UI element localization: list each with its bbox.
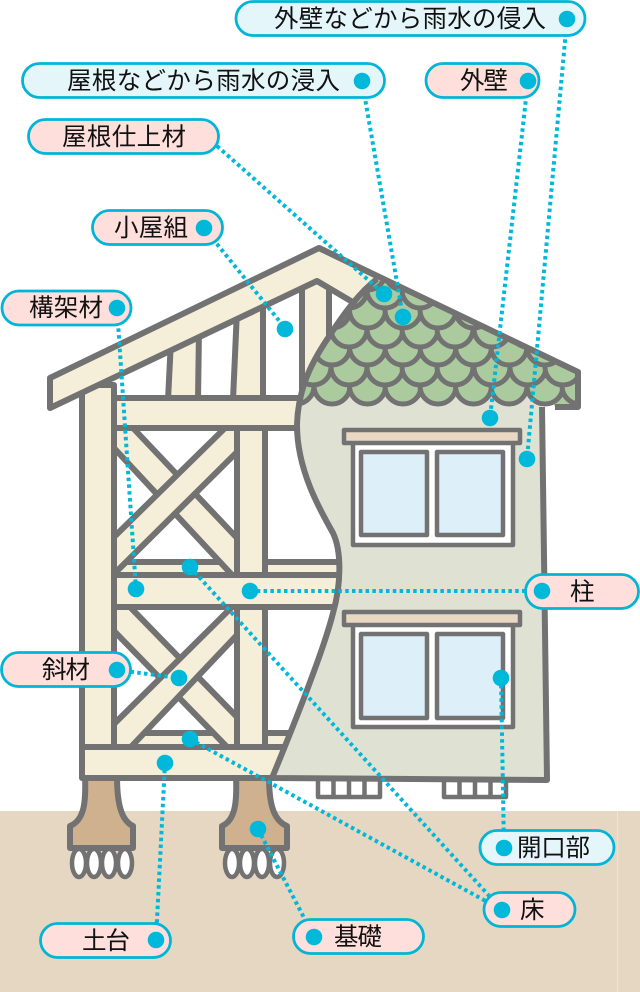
lower window — [344, 612, 520, 727]
sill — [82, 747, 312, 778]
label: 構架材: 構架材 — [29, 294, 103, 322]
leader lines — [117, 19, 567, 940]
label: 斜材: 斜材 — [42, 656, 90, 684]
label: 柱 — [526, 574, 638, 608]
wall and roof outline — [272, 248, 578, 780]
label: 構架材 — [2, 291, 131, 325]
roof tiles — [302, 280, 575, 407]
label: 基礎 — [294, 920, 424, 954]
label: 開口部 — [480, 830, 614, 864]
label: 土台: 土台 — [82, 927, 130, 955]
upper window — [344, 430, 520, 545]
label: 屋根仕上材 — [28, 120, 218, 154]
roof beam — [50, 248, 420, 408]
floor joists — [114, 562, 344, 748]
foundation: right footing — [222, 776, 287, 877]
foundation: left footing — [70, 776, 133, 877]
label: 外壁などから雨水の侵入 — [236, 2, 585, 36]
attic studs — [168, 270, 329, 400]
ground — [0, 811, 640, 992]
label: 床 — [484, 892, 575, 926]
label: 小屋組 — [92, 210, 222, 244]
label: 小屋組: 小屋組 — [114, 214, 188, 242]
target dots — [128, 286, 535, 837]
beams — [114, 398, 344, 607]
label: 柱: 柱 — [570, 578, 594, 606]
underfloor vents — [318, 778, 506, 797]
label: 土台 — [40, 924, 170, 958]
label: 屋根などから雨水の浸入 — [22, 64, 384, 98]
label: 斜材 — [2, 652, 130, 686]
label: 外壁: 外壁 — [460, 67, 508, 95]
diagonal braces — [114, 428, 237, 750]
label: 開口部: 開口部 — [517, 834, 590, 862]
wooden frame — [50, 248, 420, 778]
label: 屋根などから雨水の浸入: 屋根などから雨水の浸入 — [67, 67, 340, 95]
exterior wall — [272, 279, 578, 780]
label: 床: 床 — [520, 897, 544, 924]
label: 外壁などから雨水の侵入: 外壁などから雨水の侵入 — [274, 5, 546, 33]
label: 外壁 — [426, 64, 539, 98]
label: 基礎: 基礎 — [334, 923, 382, 951]
posts — [82, 385, 265, 750]
label: 屋根仕上材: 屋根仕上材 — [62, 123, 186, 151]
